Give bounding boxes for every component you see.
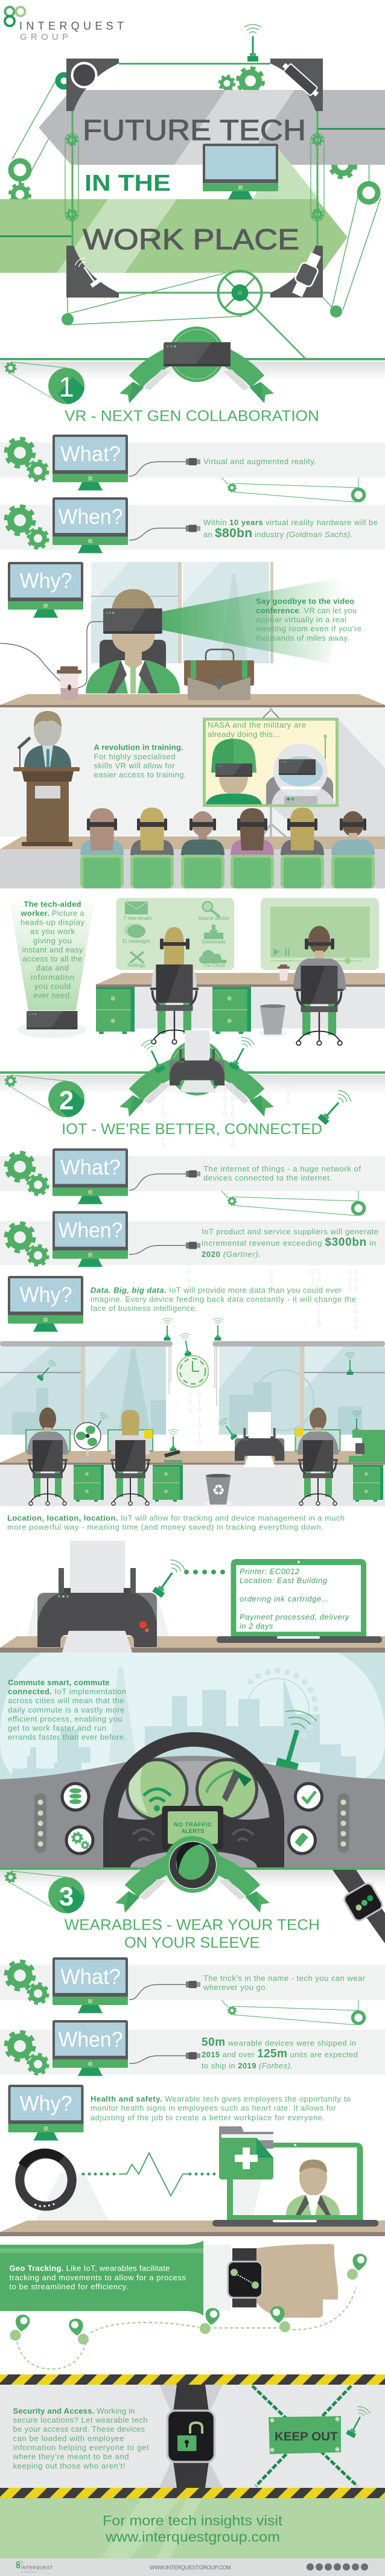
- VR collaboration text: meeting room even if you're: [256, 624, 361, 633]
- binary digits: 1: [231, 1102, 235, 1111]
- security text: can be loaded with employee: [13, 2434, 124, 2443]
- training text: A revolution in training.: [94, 742, 183, 752]
- audience member 2: [130, 808, 174, 888]
- worker with dark hair: [293, 926, 346, 1045]
- IoT why text: imagine. Every device feeding back data constantly - it will change the: [91, 1295, 356, 1304]
- binary digits: 1: [286, 1089, 290, 1098]
- gauges: [126, 1758, 258, 1821]
- security text: be your access card. These devices: [13, 2425, 145, 2434]
- binary digits: 0: [188, 1398, 192, 1407]
- IoT when row: IoT product and service suppliers will generate: [202, 1227, 378, 1236]
- social icons: [307, 2563, 368, 2571]
- binary digits: 0: [161, 1141, 165, 1150]
- band below route: [106, 2308, 161, 2355]
- VR collaboration text: [256, 597, 361, 642]
- wearables why monitor: [8, 2085, 83, 2140]
- IoT belt: [221, 1191, 364, 1216]
- VR when row: an $80bn industry (Goldman Sachs).: [203, 526, 352, 540]
- commute text: Commute smart, commute: [8, 1678, 110, 1687]
- training text: skills VR will allow for: [94, 761, 175, 770]
- waste bin: [258, 1004, 287, 1037]
- smartwatch at top right: [332, 1870, 385, 1943]
- training room background: [0, 707, 385, 888]
- laptop with health profile: [212, 2143, 378, 2227]
- audience seated in VR: [80, 808, 375, 888]
- tech-aided worker projector: worker. Picture a: [21, 909, 84, 918]
- health shadow and desk: [0, 2173, 385, 2236]
- steering wheel: NO TRAFFIC: [174, 1822, 212, 1828]
- section 3 heading: [65, 1917, 320, 1951]
- binary digits: 1: [188, 1391, 192, 1399]
- keep out sign: [269, 2416, 341, 2454]
- binary digits: 1: [197, 1414, 202, 1423]
- wearables belt: [221, 2000, 364, 2025]
- audience member 5: [281, 808, 324, 888]
- binary digits: 1: [317, 1284, 321, 1292]
- heads-up display panel: icons: Search device: [199, 916, 229, 921]
- binary digits: 0: [161, 1110, 165, 1118]
- section 3 divider: [0, 1867, 385, 1888]
- office worker 2: [108, 1410, 153, 1505]
- binary digits: 1: [161, 1118, 165, 1126]
- section 3 heading: WEARABLES - WEAR YOUR TECH: [65, 1917, 320, 1934]
- IoT when row: [0, 1211, 385, 1267]
- section 1 number badge: 1: [59, 371, 74, 403]
- IoT what row: [0, 1149, 385, 1204]
- wearables why text: monitor health signs in employees such as heart rate. It allows for: [91, 2103, 337, 2112]
- title text: [83, 115, 306, 256]
- binary digits: 1: [223, 1102, 227, 1111]
- commute text: across cities will mean that the: [8, 1696, 124, 1705]
- office desk strip: [0, 1451, 385, 1506]
- steering wheel: [0, 1732, 385, 1886]
- commute text: efficient process, enabling you: [8, 1714, 122, 1724]
- icon: settings: [130, 952, 144, 963]
- section 2 number badge: 2: [59, 1086, 74, 1115]
- title frame with corners: [65, 59, 324, 299]
- tech-aided worker projector: giving you: [33, 936, 72, 945]
- binary digits: 1: [197, 1398, 202, 1407]
- sign antenna: [343, 2405, 371, 2440]
- binary digits: 1: [161, 1086, 165, 1095]
- binary digits: 1: [286, 1074, 290, 1082]
- small logo: GROUP: [21, 2571, 36, 2574]
- binary digits: 0: [348, 1276, 352, 1284]
- keep out sign: KEEP OUT: [275, 2431, 338, 2444]
- IoT why monitor: [8, 1276, 83, 1331]
- section 2 antenna: [316, 1088, 353, 1127]
- tech-aided worker projector: ever need.: [33, 991, 72, 1000]
- call to action footer: www.interquestgroup.com: [105, 2529, 280, 2545]
- VR when row: [0, 497, 385, 553]
- VR what row: Virtual and augmented reality.: [203, 457, 316, 466]
- binary digits: 1: [311, 1276, 315, 1284]
- connected bin: ♻: [212, 1482, 225, 1499]
- binary digits: 0: [223, 1094, 227, 1103]
- printer antenna signal: [150, 1558, 225, 1599]
- wall clock: [177, 1356, 208, 1387]
- wearables when row: 2015 and over 125m units are expected: [202, 2048, 358, 2061]
- heads-up display panel: icons: [116, 898, 234, 970]
- coffee machine: [349, 1430, 385, 1462]
- commute text: daily commute is a vastly more: [8, 1706, 124, 1714]
- IoT what row: What?: [60, 1156, 121, 1179]
- binary digits: 1: [348, 1284, 352, 1292]
- office worker 1: [26, 1408, 70, 1505]
- binary digits: 0: [187, 1268, 191, 1277]
- wrist watch with map: [228, 2248, 262, 2307]
- binary digits: 0: [311, 1284, 315, 1292]
- poster: NASA and the military: already doing this...: [208, 730, 280, 739]
- wearables what row: The trick’s in the name - tech you can wear: [203, 1974, 366, 1983]
- icon: cloud: [199, 950, 227, 963]
- heads-up display panel: video player: [261, 898, 379, 970]
- heads-up display panel: icons: 7 new emails: [124, 916, 151, 921]
- IoT what row: The internet of things - a huge network of: [203, 1164, 361, 1173]
- person wearing VR headset: [0, 589, 180, 693]
- fist: [256, 2244, 338, 2318]
- VR collaboration text: conference. VR can let you: [256, 606, 357, 615]
- VR what row: [0, 435, 385, 490]
- office printer: [235, 1412, 284, 1467]
- spoke wheel: [218, 271, 262, 314]
- wearables why text: Health and safety. Wearable tech gives employers the opportunity to: [91, 2094, 351, 2103]
- sleeve with geo tracking text: to be streamlined for efficiency.: [10, 2282, 128, 2291]
- health tracking band: [20, 2153, 72, 2207]
- section 2 number badge: [5, 1075, 84, 1117]
- title machinery: belts, wheels and gears: [10, 69, 381, 359]
- security text: where they’re meant to be and: [12, 2452, 129, 2461]
- call to action footer: [0, 2498, 385, 2558]
- location text: [7, 1514, 345, 1532]
- commute text: get to work faster and run: [8, 1724, 106, 1732]
- binary digits: 1: [187, 1276, 191, 1284]
- VR when row: Within 10 years virtual reality hardware will be: [203, 518, 378, 527]
- binary digits: 1: [348, 1268, 352, 1277]
- section 2 heading: IOT - WE’RE BETTER, CONNECTED: [62, 1121, 322, 1138]
- binary digits: 1: [317, 1315, 321, 1324]
- binary digits: 1: [223, 1086, 227, 1095]
- binary digits: 0: [197, 1391, 202, 1399]
- small coffee cup on desk: [278, 964, 290, 981]
- binary digits: 0: [270, 1284, 274, 1292]
- coffee cup: [57, 666, 81, 700]
- VR collaboration text: appear virtually in a real: [256, 615, 346, 624]
- heads-up display panel: icons: Settings: [128, 963, 145, 968]
- binary digits: 0: [197, 1438, 202, 1446]
- commute text: [8, 1678, 126, 1742]
- training text: For highly specialised: [94, 752, 175, 761]
- dashed tracking route with pins: [10, 2254, 367, 2369]
- laptop with printer order: Payment processed, delivery: [240, 1613, 350, 1622]
- title text: IN THE: [84, 171, 171, 196]
- section 3 number badge: 3: [59, 1882, 74, 1911]
- heads-up display panel: icons: 11 messages: [122, 939, 151, 944]
- binary digits: 1: [317, 1307, 321, 1316]
- office worker 3: [295, 1408, 340, 1505]
- tech-aided worker projector: instant and easy: [22, 945, 83, 954]
- IoT why text: Data. Big, big data. IoT will provide more data than you could ever: [91, 1286, 342, 1295]
- IoT why text: [91, 1286, 356, 1313]
- VR what row: What?: [60, 442, 121, 466]
- small logo: [17, 2562, 53, 2574]
- binary digits: 1: [354, 1315, 358, 1324]
- white gap: [0, 888, 385, 985]
- sleeve with geo tracking text: [0, 2240, 231, 2316]
- binary digits: 0: [161, 1094, 165, 1103]
- binary digits: 0: [223, 1110, 227, 1118]
- audience member 6: [331, 811, 375, 888]
- wearables what row: wherever you go.: [203, 1983, 268, 1992]
- icon: search: [203, 902, 220, 917]
- steering wheel: ALERTS: [181, 1828, 204, 1835]
- laptop with printer order: ordering ink cartridge...: [240, 1595, 329, 1604]
- wearables when row: to ship in 2019 (Forbes).: [202, 2061, 293, 2070]
- binary digits: 1: [161, 1126, 165, 1134]
- binary digits: 0: [231, 1110, 235, 1118]
- security text: Security and Access. Working in: [13, 2406, 135, 2415]
- binary digits: 1: [161, 1133, 165, 1142]
- heads-up display panel: icons: Downloads: [202, 939, 226, 945]
- location text: Location, location, location. IoT will allow for tracking and device management in a much: [7, 1514, 345, 1523]
- wearables when row: When?: [58, 2028, 123, 2052]
- binary digits: 0: [354, 1299, 358, 1308]
- logo: Interquest Group: INTERQUEST: [19, 20, 124, 32]
- poster: NASA and the military: [204, 708, 337, 846]
- bottom strip: WWW.INTERQUESTGROUP.COM: [150, 2565, 231, 2571]
- logo: Interquest Group: [5, 7, 124, 42]
- icon: mail: [125, 902, 148, 914]
- poster: NASA and the military: NASA and the military are: [208, 721, 306, 730]
- tech-aided worker projector: data and: [36, 963, 69, 972]
- heads-up display panel: icons: The Cloud: [203, 963, 224, 968]
- hazard tape top: [0, 2374, 385, 2385]
- printer laptop desk: [0, 1636, 385, 1653]
- smartwatch with open padlock: [168, 2385, 215, 2488]
- IoT why monitor: Why?: [19, 1283, 72, 1307]
- tech-aided worker projector: heads-up display: [21, 918, 84, 927]
- title arrow: grey band: [39, 90, 385, 165]
- training text: easier access to training.: [94, 770, 186, 779]
- section 1 ribbon with VR headset: [119, 327, 274, 403]
- binary digits: 0: [197, 1422, 202, 1430]
- dashboard buttons: [62, 1784, 322, 1854]
- tech-aided worker projector: access to all the: [23, 954, 82, 963]
- laptop with printer order: Location: East Building: [240, 1576, 328, 1585]
- worker with blonde hair: [150, 927, 199, 1044]
- wearables when row: 50m wearable devices were shipped in: [202, 2036, 356, 2048]
- desk: [0, 694, 385, 707]
- title text: FUTURE TECH: [83, 115, 306, 147]
- windscreen view: [0, 1653, 385, 1867]
- hazard tape bottom: [0, 2488, 385, 2498]
- connected antennas: [36, 1318, 361, 1479]
- binary digits: 1: [197, 1430, 202, 1438]
- title text: WORK PLACE: [83, 224, 299, 256]
- car antenna: [270, 1707, 318, 1773]
- binary digits: 0: [317, 1299, 321, 1308]
- audience member 4: [231, 808, 274, 888]
- binary digits: 0: [286, 1097, 290, 1106]
- heart rate line: [82, 2153, 216, 2196]
- binary digits: 0: [286, 1082, 290, 1090]
- binary digits: 1: [231, 1133, 235, 1142]
- title arrow: green band: [0, 149, 348, 273]
- tech-aided worker projector: you could: [34, 982, 71, 991]
- security text: information helping everyone to get: [13, 2443, 149, 2452]
- fan: [74, 1423, 101, 1462]
- binary digits: 1: [317, 1268, 321, 1277]
- call to action footer: For more tech insights visit: [103, 2513, 283, 2528]
- binary digits: 0: [317, 1321, 321, 1329]
- tech-aided worker projector: [8, 896, 95, 1038]
- IoT what row: devices connected to the internet.: [203, 1173, 332, 1182]
- VR why monitor: Why?: [19, 569, 72, 593]
- commute text: connected. IoT implementation: [8, 1687, 126, 1696]
- wearables what row: [0, 1957, 385, 2013]
- desk lamp: [164, 1452, 182, 1462]
- binary digits: 0: [187, 1284, 191, 1292]
- audience member 1: [80, 808, 124, 888]
- location text: more powerful way - meaning time (and money saved) in tracking everything down.: [7, 1523, 323, 1532]
- binary digits: 0: [231, 1094, 235, 1103]
- icon: messages: [124, 923, 145, 938]
- binary digits: 0: [231, 1141, 235, 1150]
- binary digits: [161, 1074, 358, 1446]
- binary digits: 0: [354, 1323, 358, 1331]
- wearables why monitor: Why?: [19, 2092, 72, 2115]
- section 2 divider: [0, 1071, 385, 1094]
- section 1 divider: [0, 358, 385, 381]
- medical folder: [219, 2126, 273, 2179]
- section 3 ribbon with smart band: [115, 1836, 270, 1913]
- binary digits: 1: [231, 1086, 235, 1095]
- security panel: [0, 2384, 385, 2488]
- binary digits: 0: [317, 1276, 321, 1284]
- wearables why text: adjusting of the job to create a better workplace for everyone.: [91, 2113, 325, 2122]
- wearables what row: What?: [60, 1965, 121, 1989]
- binary digits: 0: [354, 1307, 358, 1316]
- laptop with printer order: in 2 days: [240, 1622, 273, 1631]
- binary digits: 1: [270, 1276, 274, 1284]
- printer body: [37, 1568, 157, 1667]
- icon: downloads: [204, 925, 223, 939]
- tech-aided worker projector: The tech-aided: [24, 900, 81, 909]
- bottom strip: [0, 2558, 385, 2576]
- IoT when row: 2020 (Gartner).: [202, 1249, 261, 1259]
- binary digits: 0: [270, 1268, 274, 1277]
- laptop with printer order: Printer: EC0012: [240, 1567, 300, 1576]
- large printer: [27, 1541, 169, 1636]
- binary digits: 1: [354, 1284, 358, 1292]
- chains crossed: [252, 2386, 357, 2486]
- binary digits: 1: [161, 1102, 165, 1111]
- tech-aided worker projector: information: [31, 973, 74, 982]
- IoT why text: face of business intelligence.: [91, 1304, 197, 1313]
- commute text: errands faster than ever before.: [8, 1733, 126, 1742]
- IoT when row: When?: [58, 1219, 123, 1242]
- logo: Interquest Group: GROUP: [20, 32, 68, 42]
- VR collaboration text: thousands of miles away.: [256, 634, 349, 642]
- binary digits: 0: [354, 1276, 358, 1284]
- VR belt: [221, 477, 364, 502]
- wearables why text: [91, 2094, 351, 2122]
- section 3 number badge: [5, 1871, 84, 1913]
- tech-aided worker projector: as you work: [30, 927, 75, 936]
- security text: secure locations? Let wearable tech: [13, 2415, 147, 2425]
- section 2 ribbon with printer: [119, 1030, 274, 1117]
- binary digits: 0: [311, 1268, 315, 1277]
- section 3 heading: ON YOUR SLEEVE: [124, 1934, 259, 1951]
- VR when row: When?: [58, 505, 123, 529]
- training text: [94, 742, 186, 779]
- security text: [12, 2406, 149, 2470]
- IoT when row: incremental revenue exceeding $300bn in: [202, 1236, 376, 1249]
- office desk and drawers: [96, 973, 385, 1034]
- VR why monitor: [8, 562, 83, 618]
- briefcase: [184, 649, 254, 700]
- sleeve with geo tracking text: Geo Tracking. Like IoT, wearables facilitate: [10, 2264, 170, 2273]
- windows with city view: [91, 562, 273, 663]
- binary digits: 1: [231, 1118, 235, 1126]
- green VR projection beam: [162, 577, 344, 663]
- binary digits: 0: [197, 1406, 202, 1415]
- office windows: [0, 1341, 385, 1435]
- sleeve with geo tracking text: tracking and movements to allow for a process: [10, 2273, 186, 2282]
- small logo: INTERQUEST: [21, 2566, 53, 2570]
- security text: keeping out those who aren’t!: [13, 2461, 126, 2470]
- antenna on top of frame: [244, 24, 261, 62]
- wearables when row: [0, 2020, 385, 2076]
- section 1 number badge: [5, 362, 84, 404]
- binary digits: 1: [231, 1126, 235, 1134]
- title monitor: [203, 144, 278, 199]
- audience member 3: [181, 811, 224, 888]
- presenter at podium: [13, 711, 80, 846]
- binary digits: 1: [188, 1406, 192, 1415]
- section 1 heading: VR - NEXT GEN COLLABORATION: [65, 408, 319, 425]
- laptop with printer order: [217, 1559, 382, 1643]
- connected bin: [204, 1474, 233, 1506]
- binary digits: 1: [354, 1268, 358, 1277]
- VR collaboration text: Say goodbye to the video: [256, 597, 354, 606]
- car dashboard: [0, 1756, 385, 1867]
